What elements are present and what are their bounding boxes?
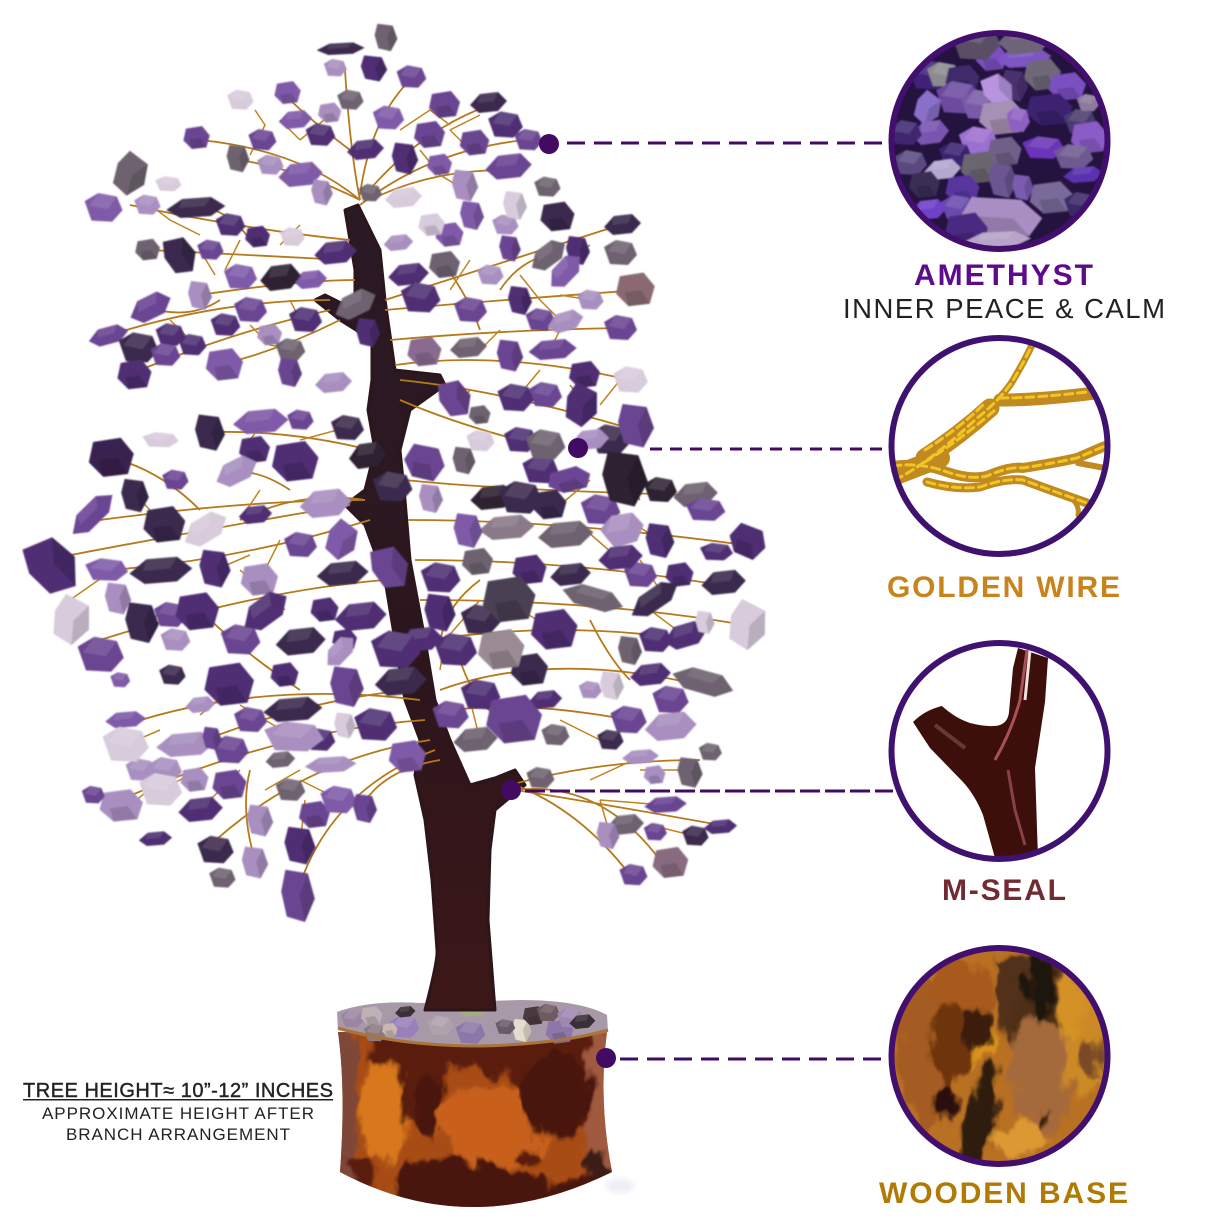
trunk bbox=[315, 205, 525, 1010]
text block: tree height: APPROXIMATE HEIGHT AFTER bbox=[42, 1104, 314, 1123]
connector: wooden base bbox=[596, 1048, 890, 1068]
circle: golden wire close-up bbox=[892, 338, 1108, 554]
label: golden wire: GOLDEN WIRE bbox=[887, 571, 1120, 604]
label: wooden base: WOODEN BASE bbox=[879, 1177, 1128, 1210]
wooden base with crushed stones bbox=[337, 1000, 612, 1207]
label: amethyst: INNER PEACE & CALM bbox=[843, 293, 1165, 324]
wire twigs bbox=[70, 110, 695, 845]
text block: tree height: BRANCH ARRANGEMENT bbox=[66, 1125, 290, 1144]
label: amethyst bbox=[843, 259, 1165, 324]
label: m-seal: M-SEAL bbox=[942, 874, 1066, 907]
circle: amethyst close-up bbox=[888, 22, 1112, 254]
amethyst gem leaves bbox=[17, 24, 774, 922]
golden wire branches bbox=[45, 70, 745, 890]
text block: tree height bbox=[23, 1080, 333, 1144]
circle: m-seal close-up bbox=[892, 643, 1108, 859]
circle: wooden base close-up bbox=[888, 945, 1112, 1169]
tree shadow under base bbox=[606, 1179, 634, 1193]
label: amethyst: AMETHYST bbox=[914, 259, 1093, 292]
connector: golden wire bbox=[568, 438, 890, 458]
connector: amethyst bbox=[539, 134, 890, 154]
text block: tree height: TREE HEIGHT≈ 10”-12” INCHES bbox=[23, 1080, 333, 1102]
connector: m-seal bbox=[501, 780, 893, 800]
